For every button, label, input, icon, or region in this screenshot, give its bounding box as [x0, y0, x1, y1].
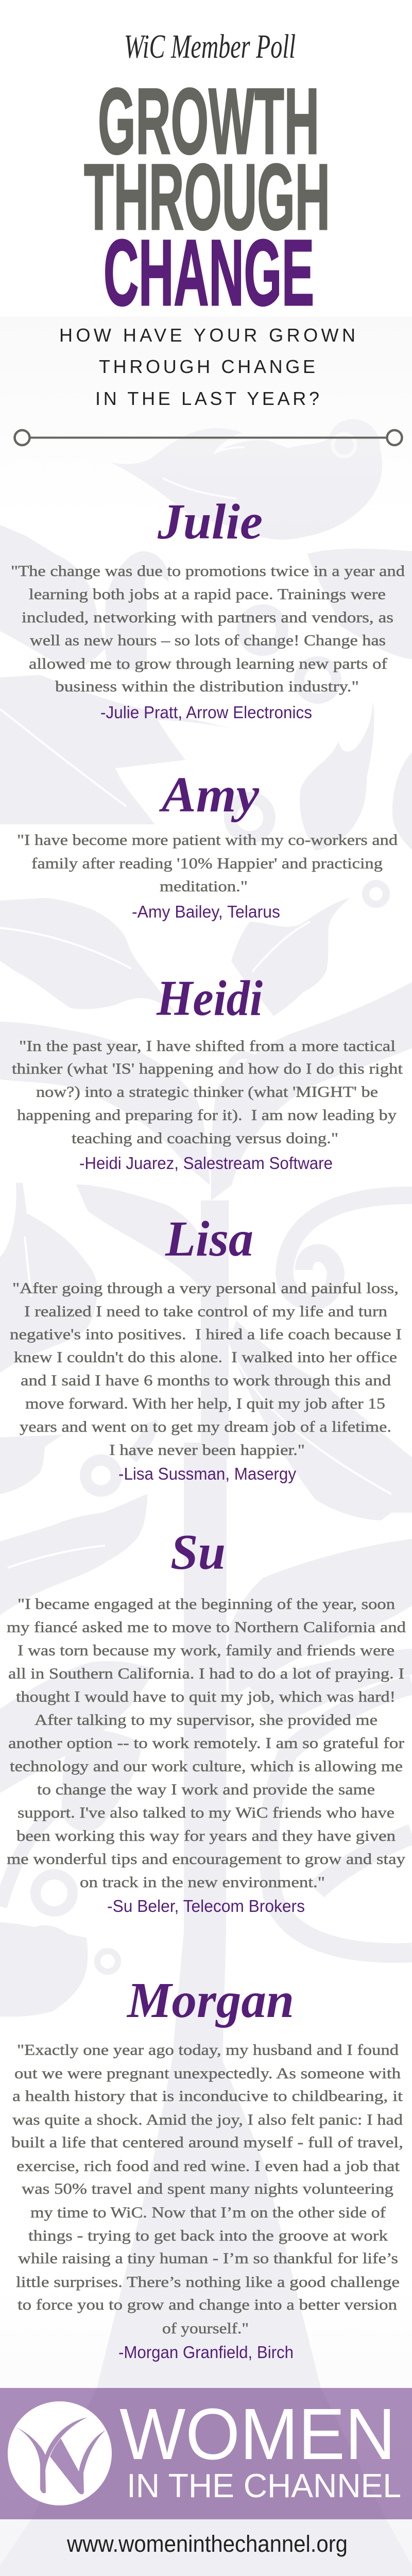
quote: Su: "I became engaged at the beginning of the year, soon: [18, 1596, 395, 1613]
quote: Su: After talking to my supervisor, she provided me: [35, 1711, 377, 1728]
quote: Morgan: things - trying to get back into the groove at work: [28, 2227, 388, 2244]
quote: Morgan: little surprises. There’s nothing like a good challenge: [16, 2274, 400, 2291]
quote: Morgan: [11, 2041, 403, 2337]
name: Morgan: Morgan: [126, 1973, 294, 2028]
quote: Julie: allowed me to grow through learning new parts of: [29, 655, 387, 672]
quote: Amy: meditation.": [160, 878, 248, 895]
poll question: IN THE LAST YEAR?: [95, 388, 319, 409]
quote: Su: my fiancé asked me to move to Northern California and: [7, 1619, 406, 1636]
quote: Morgan: was quite a shock. Amid the joy, I also felt panic: I had: [12, 2111, 403, 2128]
quote: Su: all in Southern California. I had to do a lot of praying. I: [8, 1665, 404, 1682]
panel: Julie: [11, 494, 405, 722]
quote: Amy: "I have become more patient with my co-workers and: [17, 832, 398, 849]
quote: Morgan: out we were pregnant unexpectedly. As someone with: [14, 2065, 401, 2082]
panel: Su: [7, 1524, 406, 1916]
quote: Lisa: I realized I need to take control of my life and turn: [24, 1303, 387, 1320]
name: Lisa: Lisa: [165, 1211, 253, 1267]
quote: Julie: business within the distribution industry.": [55, 678, 359, 695]
poll question: HOW HAVE YOUR GROWN: [59, 325, 355, 346]
attribution: Morgan: -Morgan Granfield, Birch: [118, 2343, 294, 2362]
quote: Julie: learning both jobs at a rapid pace. Trainings were: [29, 586, 386, 603]
footer band: [0, 2388, 412, 2519]
name: Julie: Julie: [157, 494, 263, 550]
quote: Lisa: knew I couldn't do this alone. I walked into her office: [14, 1349, 397, 1366]
quote: Heidi: now?) into a strategic thinker (what 'MIGHT' be: [36, 1083, 378, 1100]
divider line with end circles: [14, 430, 402, 445]
quote: Heidi: teaching and coaching versus doing.": [72, 1130, 338, 1147]
quote: Morgan: my time to WiC. Now that I’m on the other side of: [30, 2204, 386, 2221]
quote: Su: been working this way for years and they have given: [16, 1827, 396, 1844]
quote: Julie: included, networking with partners and vendors, as: [22, 609, 393, 626]
name: Amy: Amy: [159, 767, 260, 823]
quote: Su: another option -- to work remotely. I am so grateful for: [8, 1735, 404, 1752]
quote: Heidi: happening and preparing for it). I am now leading by: [17, 1107, 397, 1124]
quote: Su: I was torn because my work, family and friends were: [18, 1642, 394, 1659]
quote: Su: thought I would have to quit my job, which was hard!: [16, 1688, 396, 1705]
attribution: Heidi: -Heidi Juarez, Salestream Software: [79, 1154, 333, 1173]
quote: Lisa: move forward. With her help, I quit my job after 15: [25, 1395, 385, 1412]
quote: Su: support. I've also talked to my WiC friends who have: [18, 1804, 394, 1821]
quote: Amy: family after reading '10% Happier' and practicing: [31, 855, 383, 872]
quote: Su: on track in the new environment.": [80, 1874, 325, 1891]
name: Heidi: Heidi: [156, 971, 263, 1026]
name: Su: Su: [170, 1524, 226, 1580]
wordmark: Women: WOMEN: [119, 2393, 396, 2475]
quote: Su: technology and our work culture, which is allowing me: [10, 1758, 403, 1775]
panel: Heidi: [12, 971, 403, 1173]
quote: Julie: well as new hours – so lots of change! Change has: [30, 632, 386, 649]
quote: Su: to change the way I work and provide the same: [37, 1781, 375, 1798]
quote: Heidi: [12, 1038, 403, 1147]
poll question: THROUGH CHANGE: [99, 356, 315, 377]
icon: Women in the Channel logo: [8, 2401, 112, 2505]
quote: Morgan: of yourself.": [162, 2320, 249, 2337]
quote: Lisa: [10, 1280, 402, 1459]
attribution: Julie: -Julie Pratt, Arrow Electronics: [100, 703, 312, 722]
quote: Su: me wonderful tips and encouragement to grow and stay: [7, 1851, 405, 1868]
quote: Morgan: exercise, rich food and red wine. I even had a job that: [16, 2158, 400, 2175]
panel: Lisa: [10, 1211, 402, 1483]
wordmark: In the Channel: IN THE CHANNEL: [127, 2467, 401, 2504]
quote: Julie: "The change was due to promotions twice in a year and: [11, 563, 405, 580]
website URL: www.womeninthechannel.org: [66, 2531, 348, 2557]
quote: Morgan: "Exactly one year ago today, my husband and I found: [17, 2041, 399, 2059]
quote: Morgan: a health history that is inconducive to childbearing, it: [12, 2088, 403, 2105]
quote: Lisa: I have never been happier.": [109, 1442, 305, 1459]
quote: Lisa: and I said I have 6 months to work through this and: [21, 1372, 391, 1389]
quote: Lisa: negative's into positives. I hired a life coach because I: [10, 1326, 402, 1343]
panel: Morgan: [11, 1973, 403, 2362]
quote: Heidi: thinker (what 'IS' happening and how do I do this right: [12, 1060, 403, 1077]
quote: Morgan: while raising a tiny human - I’m so thankful for life’s: [18, 2250, 398, 2267]
attribution: Su: -Su Beler, Telecom Brokers: [107, 1896, 305, 1916]
quote: Amy: [17, 832, 398, 895]
quote: Su: [7, 1596, 406, 1891]
quote: Julie: [11, 563, 405, 695]
panel: Amy: [17, 767, 398, 921]
attribution: Lisa: -Lisa Sussman, Masergy: [118, 1464, 296, 1483]
poll question: [59, 325, 355, 409]
quote: Heidi: "In the past year, I have shifted from a more tactical: [19, 1038, 396, 1055]
quote: Morgan: was 50% travel and spent many nights volunteering: [22, 2180, 393, 2197]
quote: Lisa: "After going through a very personal and painful loss,: [12, 1280, 399, 1297]
quote: Lisa: years and went on to get my dream job of a lifetime.: [20, 1418, 391, 1435]
quote: Morgan: built a life that centered around myself - full of travel,: [11, 2134, 403, 2151]
title: [84, 69, 330, 325]
attribution: Amy: -Amy Bailey, Telarus: [132, 902, 280, 921]
subtitle: WiC Member Poll: WiC Member Poll: [124, 28, 296, 65]
quote: Morgan: to force you to grow and change into a better version: [18, 2296, 397, 2313]
